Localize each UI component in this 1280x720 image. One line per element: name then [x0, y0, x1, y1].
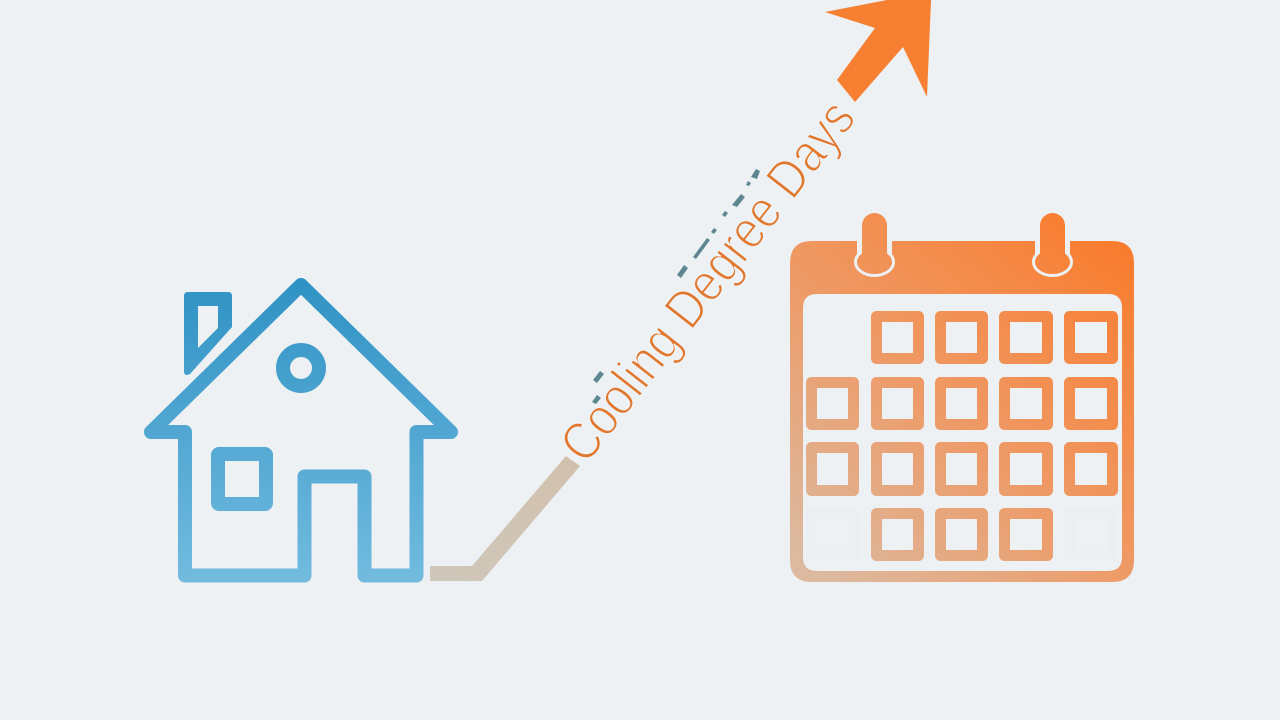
icon: calendar: [790, 213, 1134, 582]
attic round window: [283, 350, 319, 386]
binding ring left: [856, 213, 894, 276]
label: cooling degree days: [548, 89, 867, 473]
house outline with door: [151, 285, 451, 576]
icon: house: [151, 285, 451, 576]
calendar body: [790, 241, 1134, 582]
arrow upper shaft and head: [825, 0, 931, 102]
teal dashes above text: [592, 169, 760, 404]
faint empty cells: [812, 514, 1112, 556]
binding ring right: [1034, 213, 1072, 276]
calendar day cells: [812, 316, 1112, 556]
heading text along arrow: Cooling Degree Days: [548, 89, 867, 473]
arrow: rising line from house to top: [430, 0, 931, 581]
square window: [218, 454, 266, 504]
arrow lower segment: [430, 456, 580, 581]
chimney: [184, 292, 232, 375]
